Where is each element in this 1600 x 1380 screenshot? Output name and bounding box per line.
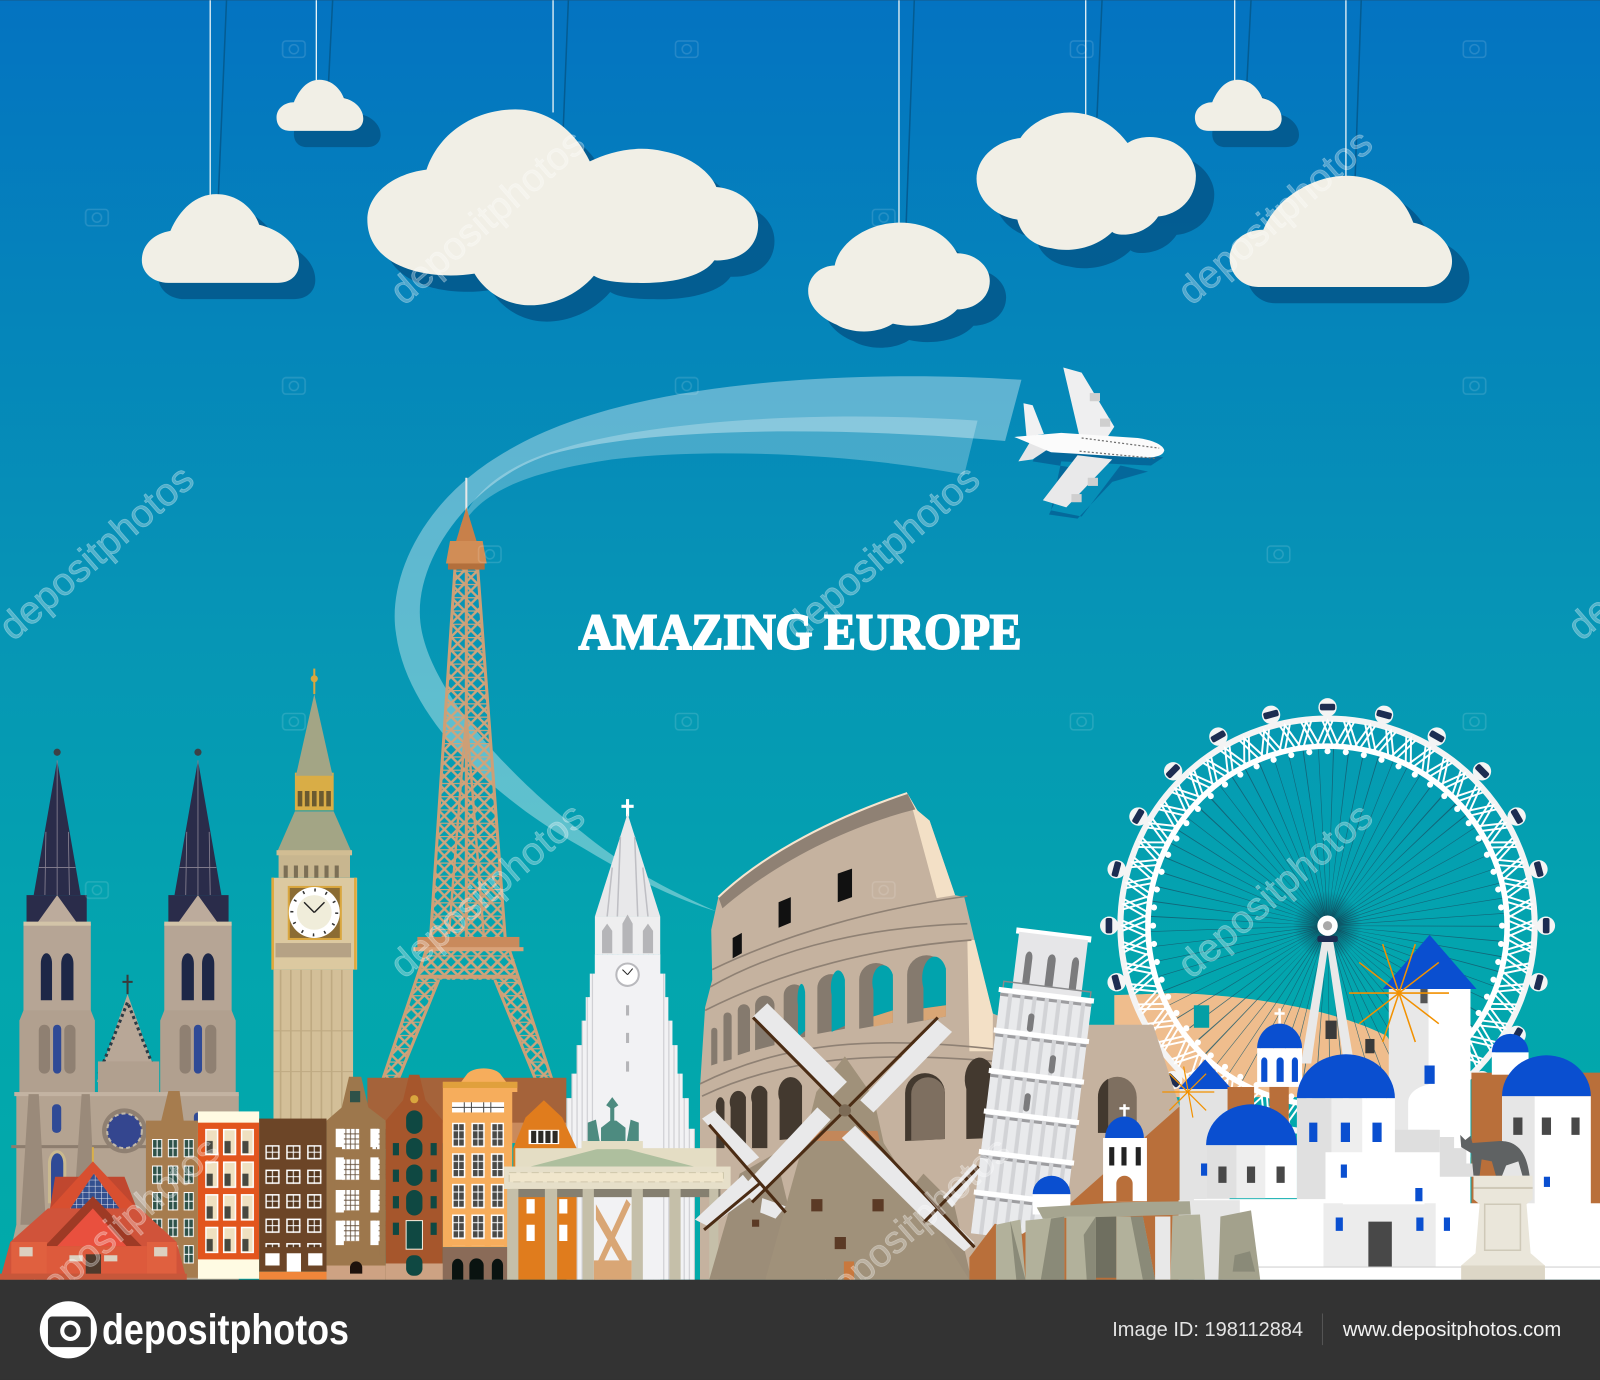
small left dome bbox=[1033, 1176, 1070, 1214]
cathedral bbox=[4, 745, 239, 1280]
brandenburg gate bbox=[504, 1097, 731, 1280]
stonehenge bbox=[996, 1201, 1260, 1280]
airplane bbox=[1014, 368, 1164, 519]
sails bbox=[695, 1003, 982, 1251]
footer bar bbox=[0, 1280, 1600, 1380]
house tan gabled bbox=[327, 1077, 387, 1280]
terraces bbox=[1194, 1152, 1470, 1280]
rear windmill right bbox=[898, 1174, 971, 1280]
footer logo: depositphotos bbox=[102, 1306, 349, 1354]
title: AMAZING EUROPE bbox=[579, 605, 1021, 661]
santorini village bbox=[969, 935, 1600, 1280]
contrail swoosh bbox=[395, 376, 1021, 911]
leaning tower of pisa bbox=[969, 926, 1102, 1245]
building behind row houses bbox=[367, 1078, 566, 1143]
small camera watermarks bbox=[86, 41, 1486, 898]
house tan bbox=[146, 1091, 198, 1278]
house yellow bbox=[443, 1068, 517, 1280]
greek windmill sails bbox=[1349, 944, 1449, 1042]
main windmill body bbox=[765, 1056, 969, 1280]
footer image id: Image ID: 198112884 bbox=[1112, 1319, 1303, 1341]
london eye ferris wheel bbox=[1098, 694, 1557, 1157]
left dome building bbox=[1201, 1104, 1297, 1198]
red roof building bbox=[0, 1147, 187, 1280]
big ben bbox=[271, 669, 357, 1123]
rear colosseum windows bbox=[1326, 1021, 1374, 1053]
small domed chapel bbox=[1257, 1008, 1302, 1087]
watermark overlay: depositphotos bbox=[777, 457, 988, 649]
windmills bbox=[695, 1003, 982, 1280]
row of amsterdam houses bbox=[146, 1068, 517, 1280]
hallgrimskirkja church bbox=[566, 799, 695, 1280]
right dome buildings bbox=[1492, 1034, 1591, 1208]
tower with blue roof bbox=[1383, 935, 1477, 1157]
she-wolf statue on pedestal bbox=[1460, 1135, 1545, 1280]
stairs bbox=[1440, 1137, 1476, 1177]
house orange bbox=[198, 1111, 259, 1279]
bell tower bbox=[1103, 1104, 1147, 1201]
footer url: www.depositphotos.com bbox=[1342, 1319, 1561, 1341]
clouds hanging on strings bbox=[142, 0, 1469, 348]
watermark overlay: depositphotos bbox=[382, 795, 593, 987]
watermark overlay: depositphotos bbox=[1170, 121, 1381, 313]
colosseum bbox=[700, 793, 1180, 1280]
eiffel tower bbox=[383, 478, 552, 1080]
rear colosseum opening bbox=[1194, 1005, 1209, 1028]
quadriga statue bbox=[588, 1097, 639, 1143]
footer logo bbox=[40, 1301, 349, 1358]
watermark overlay: depositphotos bbox=[807, 1128, 1019, 1320]
small windmill tower bbox=[1162, 1059, 1232, 1217]
rear windmill left bbox=[709, 1153, 806, 1280]
orange house behind gate bbox=[513, 1100, 577, 1280]
house brown bbox=[259, 1119, 327, 1280]
watermark overlay: depositphotos bbox=[1170, 795, 1381, 987]
house red brick bbox=[386, 1075, 443, 1280]
large centre dome building bbox=[1297, 1054, 1395, 1200]
watermark overlay: depositphotos bbox=[16, 1128, 228, 1320]
brown chimneys bbox=[1228, 1067, 1289, 1148]
colosseum rear section bbox=[1114, 993, 1423, 1097]
watermark overlay: depositphotos bbox=[382, 121, 593, 313]
